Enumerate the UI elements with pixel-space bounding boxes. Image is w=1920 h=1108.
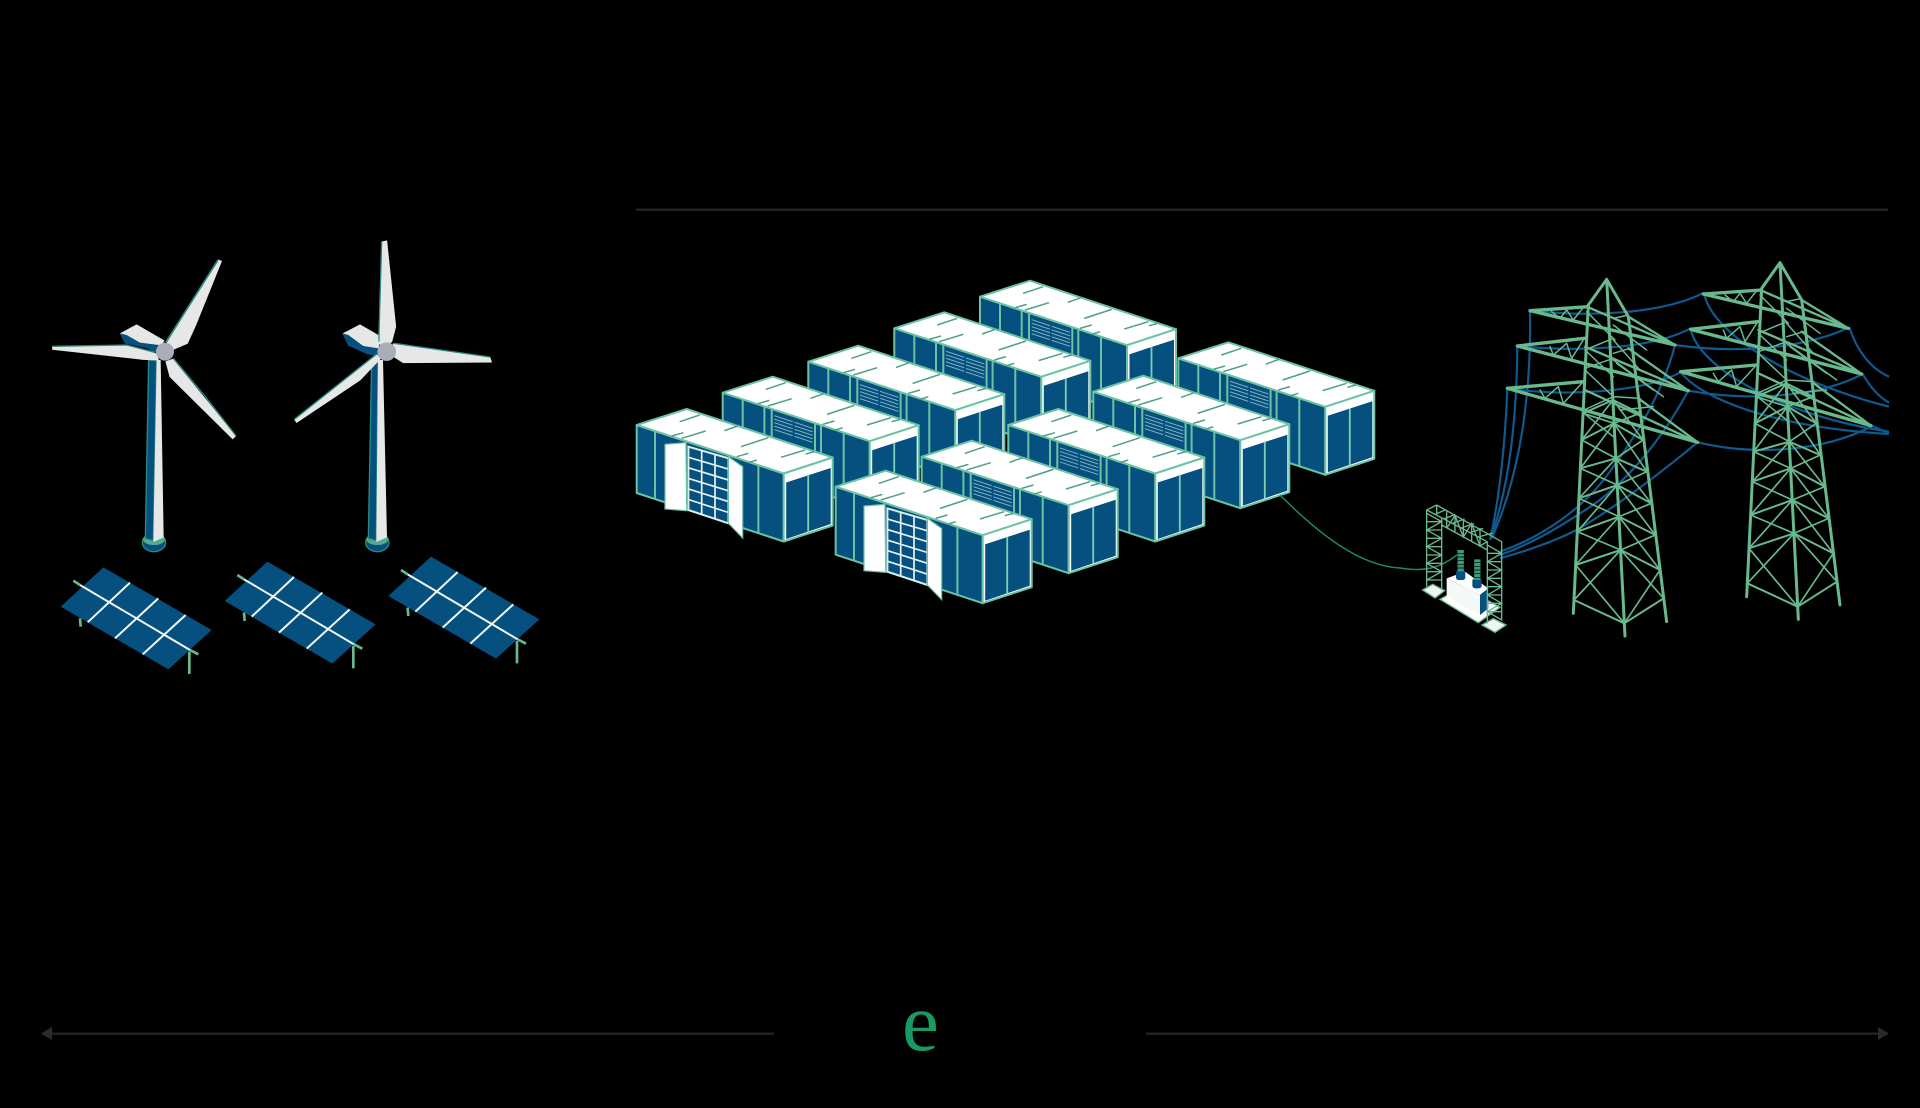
grid: substation, towers and wires (1423, 263, 1889, 636)
battery containers (637, 281, 1374, 603)
axis arrow: right (1146, 1027, 1889, 1040)
container row 2, unit 3 (1008, 409, 1204, 542)
container row 2, unit 4 (1093, 376, 1289, 508)
substation gantry (1427, 505, 1502, 623)
transmission tower 2 (1681, 263, 1871, 619)
turbine 2 (294, 241, 491, 552)
container row 1, unit 4 (894, 312, 1090, 445)
turbine 1 (53, 260, 235, 552)
solar panel 3 (388, 557, 539, 663)
axis arrow: left (41, 1027, 774, 1040)
solar panel 2 (225, 562, 376, 668)
container row 1, unit 2 (723, 377, 919, 509)
container row 2, unit 2 (922, 441, 1118, 573)
transmission tower 1 (1507, 279, 1698, 636)
solar panel 1 (61, 567, 212, 674)
container row 1, unit 5 (980, 281, 1176, 413)
container row 2, open unit (836, 471, 1032, 603)
container row 1, open unit (637, 409, 833, 542)
divider rule: top (636, 208, 1888, 211)
substation transformer (1423, 550, 1506, 632)
logo letter: e (902, 976, 939, 1068)
cable: containers to substation (1280, 495, 1457, 569)
transmission wires behind towers (1490, 293, 1889, 558)
wind turbines (53, 241, 539, 674)
container row 2, unit 5 (1178, 342, 1374, 475)
container row 1, unit 3 (808, 346, 1004, 478)
